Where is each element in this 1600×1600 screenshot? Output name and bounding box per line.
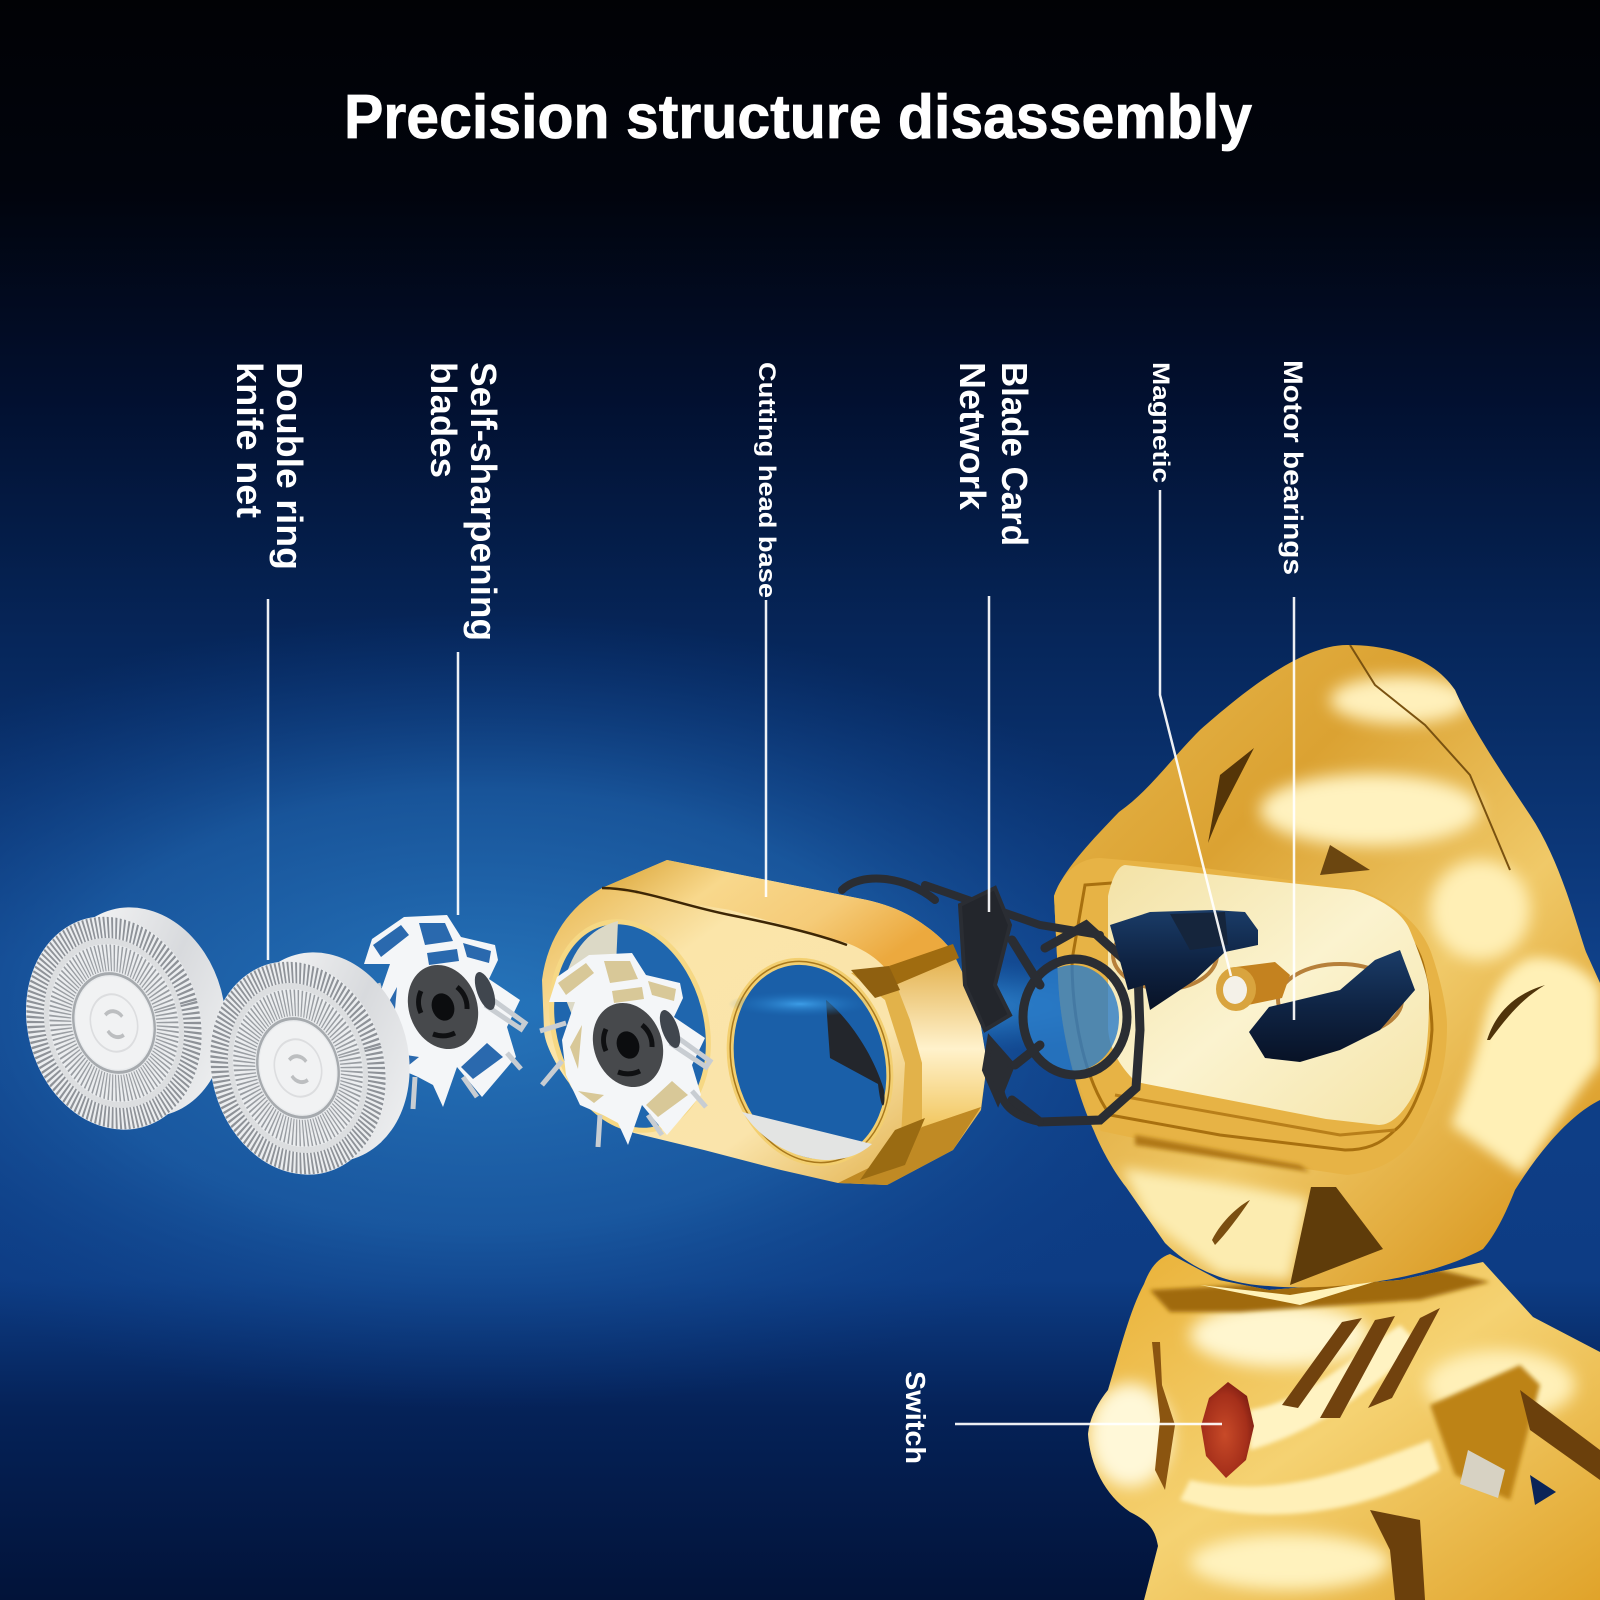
leader lines	[268, 490, 1294, 1424]
icon: gold cutting head base	[529, 860, 987, 1185]
icon: motor shaft upper	[1110, 910, 1258, 1010]
label: self-sharpening blades	[423, 362, 504, 641]
label: double ring knife net: Double ring	[269, 362, 310, 570]
hole: right opening	[708, 943, 912, 1181]
label: magnetic: Magnetic	[1147, 362, 1174, 483]
label: blade card network: Network	[952, 362, 993, 511]
label: switch: Switch	[900, 1371, 931, 1464]
product: gold robot body	[1080, 1240, 1600, 1600]
hole: left opening	[529, 904, 731, 1148]
icon: motor shaft lower	[1249, 950, 1415, 1062]
icon: double ring knife net right	[186, 933, 434, 1195]
icon: double ring knife net left	[2, 888, 250, 1150]
icon: magnetic ring	[1216, 962, 1290, 1011]
label: double ring knife net	[229, 362, 310, 570]
icon: black blade card network frame	[842, 879, 1140, 1122]
label: blade card network	[952, 362, 1035, 546]
label: cutting head base: Cutting head base	[753, 362, 780, 598]
icon: blade wheel in base	[540, 953, 710, 1147]
icon: red switch gem	[1201, 1382, 1254, 1478]
label: self-sharpening blades: Self-sharpening	[463, 362, 504, 641]
ring interior	[1027, 965, 1119, 1071]
label: double ring knife net: knife net	[229, 362, 270, 518]
ring side panel	[889, 953, 987, 1127]
label: motor bearings: Motor bearings	[1278, 360, 1308, 575]
icon: self-sharpening blade wheel	[355, 915, 525, 1109]
label: blade card network: Blade Card	[994, 362, 1035, 546]
label: self-sharpening blades: blades	[423, 362, 464, 478]
title: Precision structure disassembly	[344, 83, 1252, 152]
product: gold robot head	[1040, 630, 1600, 1310]
product: visor recess	[1054, 858, 1447, 1175]
